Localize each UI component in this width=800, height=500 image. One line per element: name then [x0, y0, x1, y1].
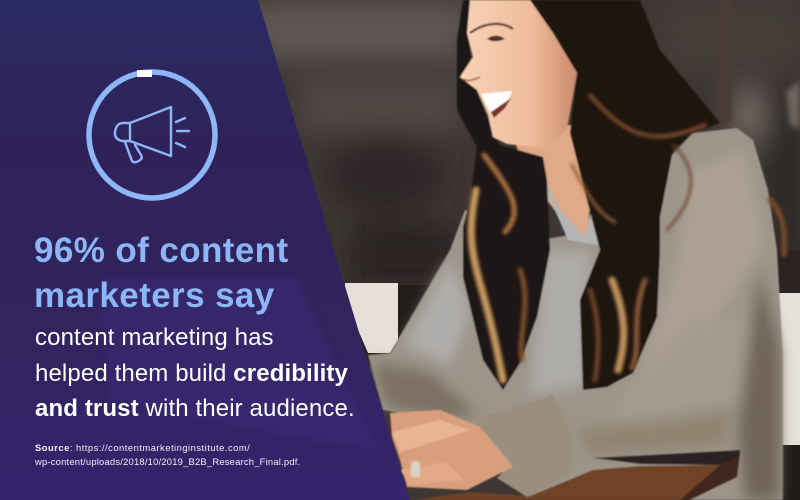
body text: helped them build credibility [35, 360, 348, 386]
icon: megaphone in ring [89, 70, 215, 198]
hand [390, 410, 513, 490]
neck and chest [510, 125, 590, 238]
face [460, 0, 577, 148]
faint laptop in panel [100, 278, 378, 450]
white chairs [345, 283, 398, 353]
table [412, 453, 740, 500]
hair [457, 0, 784, 390]
cuff [473, 395, 573, 497]
sweater [368, 128, 783, 500]
woman [368, 0, 784, 500]
headline [34, 231, 289, 315]
source note: wp-content/uploads/2018/10/2019_B2B_Research_Final.pdf. [35, 456, 300, 467]
body text [35, 324, 355, 422]
headline: marketers say [34, 276, 275, 315]
translucent text panel [0, 0, 410, 500]
source note [35, 442, 300, 468]
striped shirt [538, 172, 600, 245]
headline: 96% of content [34, 231, 289, 270]
source note: Source: https://contentmarketinginstitute.com/ [35, 442, 250, 453]
body text: and trust with their audience. [35, 395, 355, 422]
body text: content marketing has [35, 324, 274, 351]
